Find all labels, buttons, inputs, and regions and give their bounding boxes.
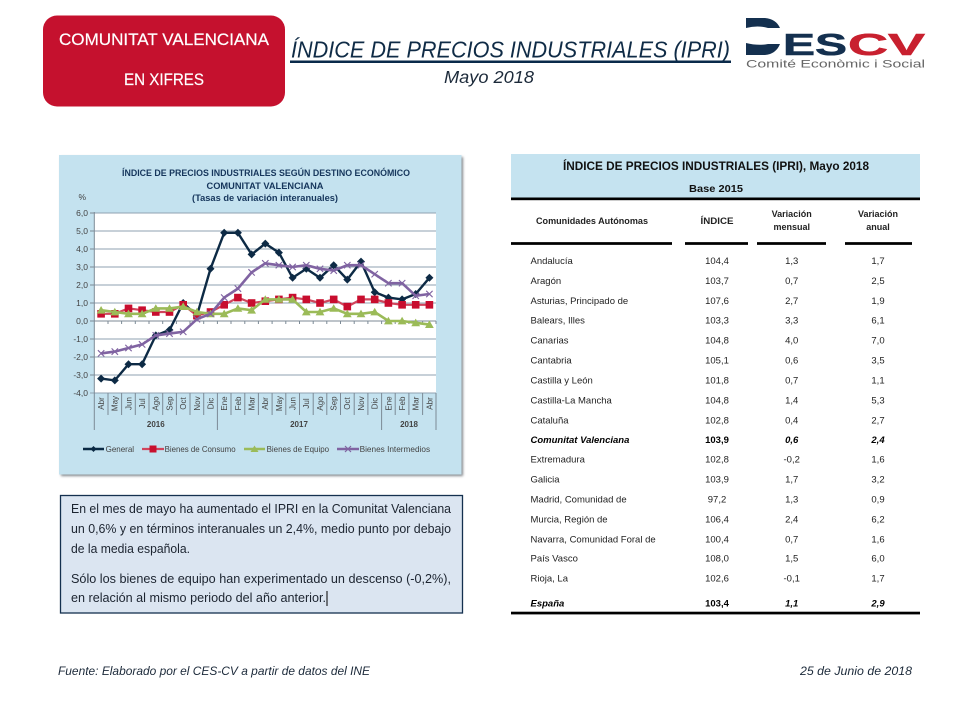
logo: CES-CV: Comité Econòmic i Social bbox=[746, 58, 925, 70]
series: Bienes de Consumo bbox=[101, 298, 429, 316]
panel: line chart bbox=[59, 155, 463, 476]
source note: Fuente: Elaborado por el CES-CV a partir de datos del INE bbox=[58, 664, 371, 678]
year labels: 2017 bbox=[290, 420, 308, 429]
month labels: Feb bbox=[234, 396, 243, 410]
table rows: 0,4 bbox=[785, 416, 798, 426]
month labels: Dic bbox=[206, 398, 215, 409]
table rows: 2,4 bbox=[785, 514, 798, 526]
legend: Bienes de Equipo bbox=[267, 444, 329, 454]
subtitle: Mayo 2018 bbox=[444, 67, 534, 87]
year labels: 2018 bbox=[400, 420, 418, 429]
month labels: Sep bbox=[165, 396, 174, 411]
table rows bbox=[530, 256, 885, 610]
month labels: Jun bbox=[288, 397, 298, 410]
y axis labels: 5,0 bbox=[76, 226, 88, 236]
table rows: 1,9 bbox=[871, 296, 885, 307]
month labels: Sep bbox=[330, 396, 339, 411]
table rows: Galicia bbox=[530, 474, 560, 486]
legend: Bienes de Consumo bbox=[165, 444, 236, 454]
table rows: 107,6 bbox=[705, 296, 729, 307]
y axis labels: % bbox=[78, 192, 86, 202]
table rows: 1,3 bbox=[785, 256, 798, 267]
table rows: 104,4 bbox=[705, 256, 729, 267]
table rows: 106,4 bbox=[705, 514, 729, 526]
text box: commentary: en relación al mismo periodo del año anterior. bbox=[71, 590, 326, 605]
table rows: Extremadura bbox=[530, 454, 586, 466]
table rows: 0,7 bbox=[785, 276, 798, 287]
chart title bbox=[122, 167, 410, 203]
y axis labels: -1,0 bbox=[73, 334, 88, 344]
axis ticks bbox=[108, 321, 436, 430]
table rows: 103,7 bbox=[705, 276, 729, 287]
month labels: Abr bbox=[425, 397, 434, 410]
text box: commentary: Sólo los bienes de equipo han experimentado un descenso (-0,2%), bbox=[71, 571, 451, 586]
y axis labels bbox=[73, 192, 88, 398]
table rows: 2,4 bbox=[870, 435, 885, 446]
chart title: COMUNITAT VALENCIANA bbox=[206, 181, 324, 191]
table rows: 6,1 bbox=[871, 316, 885, 326]
table rows: Cataluña bbox=[530, 416, 569, 426]
table rows: 97,2 bbox=[708, 494, 726, 506]
table rows: 102,6 bbox=[705, 574, 729, 584]
table rows: Andalucía bbox=[530, 256, 573, 267]
table rows: Aragón bbox=[530, 276, 561, 287]
table rows: 2,7 bbox=[871, 416, 885, 426]
text box: commentary: un 0,6% y en términos interanuales un 2,4%, medio punto por debajo bbox=[71, 521, 451, 536]
table rows: Balears, Illes bbox=[530, 316, 585, 326]
month labels: Dic bbox=[371, 398, 380, 409]
table rows: 3,2 bbox=[871, 474, 885, 486]
legend: Bienes Intermedios bbox=[360, 444, 430, 454]
table rows: 1,1 bbox=[785, 598, 798, 610]
column headers bbox=[511, 209, 912, 244]
y axis labels: -3,0 bbox=[73, 370, 88, 380]
date: 25 de Junio de 2018 bbox=[799, 664, 912, 678]
table rows: 105,1 bbox=[705, 356, 729, 366]
table rows: -0,1 bbox=[784, 574, 800, 584]
month labels: Ene bbox=[384, 396, 393, 411]
table rows: 103,4 bbox=[705, 598, 730, 610]
table rows: 1,5 bbox=[785, 554, 798, 564]
table rows: 1,7 bbox=[785, 474, 798, 486]
table rows: 1,4 bbox=[785, 396, 798, 406]
table rows: 104,8 bbox=[705, 396, 729, 406]
table rows: 102,8 bbox=[705, 454, 729, 466]
table rows: 0,6 bbox=[785, 356, 798, 366]
month labels: Abr bbox=[97, 397, 106, 410]
table rows: 2,7 bbox=[785, 296, 798, 307]
legend: General bbox=[106, 444, 134, 454]
month labels: Abr bbox=[261, 397, 270, 410]
table rows: 1,7 bbox=[871, 256, 885, 267]
month labels bbox=[97, 396, 434, 411]
table rows: Rioja, La bbox=[530, 574, 569, 584]
panel: data table bbox=[511, 154, 920, 614]
series: Bienes de Equipo bbox=[101, 299, 429, 325]
table rows: 102,8 bbox=[705, 416, 729, 426]
column headers: Comunidades Autónomas bbox=[536, 216, 648, 226]
table rows: 101,8 bbox=[705, 376, 729, 386]
table rows: 4,0 bbox=[785, 336, 798, 346]
series: Bienes Intermedios bbox=[101, 263, 429, 353]
table rows: 3,3 bbox=[785, 316, 798, 326]
table rows: 104,8 bbox=[705, 336, 729, 346]
plot area bbox=[94, 212, 436, 393]
text box: commentary: de la media española. bbox=[71, 541, 190, 556]
table rows: España bbox=[530, 598, 564, 610]
y axis labels: -4,0 bbox=[73, 388, 88, 398]
chart title: ÍNDICE DE PRECIOS INDUSTRIALES SEGÚN DESTINO ECONÓMICO bbox=[122, 167, 410, 178]
badge: Comunitat Valenciana en xifres bbox=[43, 16, 285, 106]
table rows: 1,6 bbox=[871, 454, 885, 466]
table rows: Asturias, Principado de bbox=[530, 296, 628, 307]
column headers: Variación bbox=[858, 209, 898, 219]
year labels: 2016 bbox=[147, 420, 165, 429]
month labels: Ago bbox=[316, 396, 325, 411]
badge: Comunitat Valenciana en xifres: COMUNITAT VALENCIANA bbox=[59, 31, 269, 49]
chart title: (Tasas de variación interanuales) bbox=[192, 193, 338, 203]
y axis labels: 6,0 bbox=[76, 208, 88, 218]
month labels: Oct bbox=[179, 397, 188, 410]
table rows: 3,5 bbox=[871, 356, 885, 366]
table rows: Castilla y León bbox=[530, 376, 593, 386]
month labels: Ene bbox=[220, 396, 229, 411]
column headers: ÍNDICE bbox=[700, 216, 734, 226]
table rows: 2,5 bbox=[871, 276, 885, 287]
month labels: Jun bbox=[124, 397, 133, 410]
month labels: Nov bbox=[357, 396, 366, 411]
table rows: Castilla-La Mancha bbox=[530, 396, 613, 406]
table rows: 103,3 bbox=[705, 316, 729, 326]
table rows: 7,0 bbox=[871, 336, 885, 346]
month labels: May bbox=[275, 396, 284, 411]
month labels: Jul bbox=[302, 398, 311, 409]
text box: commentary: En el mes de mayo ha aumentado el IPRI en la Comunitat Valenciana bbox=[71, 501, 452, 516]
table rows: País Vasco bbox=[530, 554, 578, 564]
month labels: Nov bbox=[193, 396, 202, 411]
table rows: 1,7 bbox=[871, 574, 885, 584]
y axis labels: 1,0 bbox=[76, 298, 88, 308]
month labels: May bbox=[111, 396, 120, 411]
table rows: 0,7 bbox=[785, 534, 798, 546]
legend bbox=[83, 444, 430, 454]
table rows: 0,7 bbox=[785, 376, 798, 386]
table rows: 6,2 bbox=[871, 514, 885, 526]
table rows: 0,6 bbox=[785, 435, 799, 446]
text box: commentary bbox=[60, 496, 462, 613]
table rows: Canarias bbox=[530, 336, 569, 346]
table rows: 1,1 bbox=[871, 376, 885, 386]
table rows: 108,0 bbox=[705, 554, 729, 564]
table rows: Murcia, Región de bbox=[530, 514, 608, 526]
logo: CES-CV: CV bbox=[848, 27, 926, 62]
table rows: 5,3 bbox=[871, 396, 885, 406]
y axis labels: -2,0 bbox=[73, 352, 88, 362]
table rows: 2,9 bbox=[870, 598, 885, 610]
table header band bbox=[511, 154, 920, 200]
table rows: Madrid, Comunidad de bbox=[530, 494, 627, 506]
badge: Comunitat Valenciana en xifres: EN XIFRES bbox=[124, 71, 204, 89]
table rows: 103,9 bbox=[705, 435, 729, 446]
month labels: Oct bbox=[343, 397, 352, 410]
logo: CES-CV: ES bbox=[783, 27, 847, 62]
month labels: Mar bbox=[412, 396, 421, 410]
y axis labels: 2,0 bbox=[76, 280, 88, 290]
table rows: -0,2 bbox=[784, 454, 800, 466]
table rows: 103,9 bbox=[705, 474, 729, 486]
month labels: Jul bbox=[138, 398, 147, 409]
title: ÍNDICE DE PRECIOS INDUSTRIALES (IPRI) bbox=[291, 36, 730, 62]
y axis labels: 3,0 bbox=[76, 262, 88, 272]
table rows: 6,0 bbox=[871, 554, 885, 564]
month labels: Ago bbox=[152, 396, 161, 411]
table rows: Navarra, Comunidad Foral de bbox=[530, 534, 656, 546]
series: General bbox=[101, 233, 429, 380]
month labels: Mar bbox=[248, 396, 256, 410]
table header band: Base 2015 bbox=[689, 183, 743, 195]
column headers: anual bbox=[866, 222, 890, 232]
table rows: Cantabria bbox=[530, 356, 572, 366]
month labels: Feb bbox=[398, 396, 407, 410]
table rows: 1,6 bbox=[871, 534, 885, 546]
column headers: Variación bbox=[772, 209, 812, 219]
table rows: 0,9 bbox=[871, 494, 885, 506]
table rows: 100,4 bbox=[705, 534, 729, 546]
year labels bbox=[147, 420, 418, 429]
logo: CES-CV bbox=[746, 18, 926, 70]
y axis labels: 0,0 bbox=[76, 316, 88, 326]
y axis labels: 4,0 bbox=[76, 244, 88, 254]
table rows: Comunitat Valenciana bbox=[530, 435, 629, 446]
column headers: mensual bbox=[773, 222, 810, 232]
table header band: ÍNDICE DE PRECIOS INDUSTRIALES (IPRI), Mayo 2018 bbox=[563, 160, 870, 173]
table rows: 1,3 bbox=[785, 494, 798, 506]
